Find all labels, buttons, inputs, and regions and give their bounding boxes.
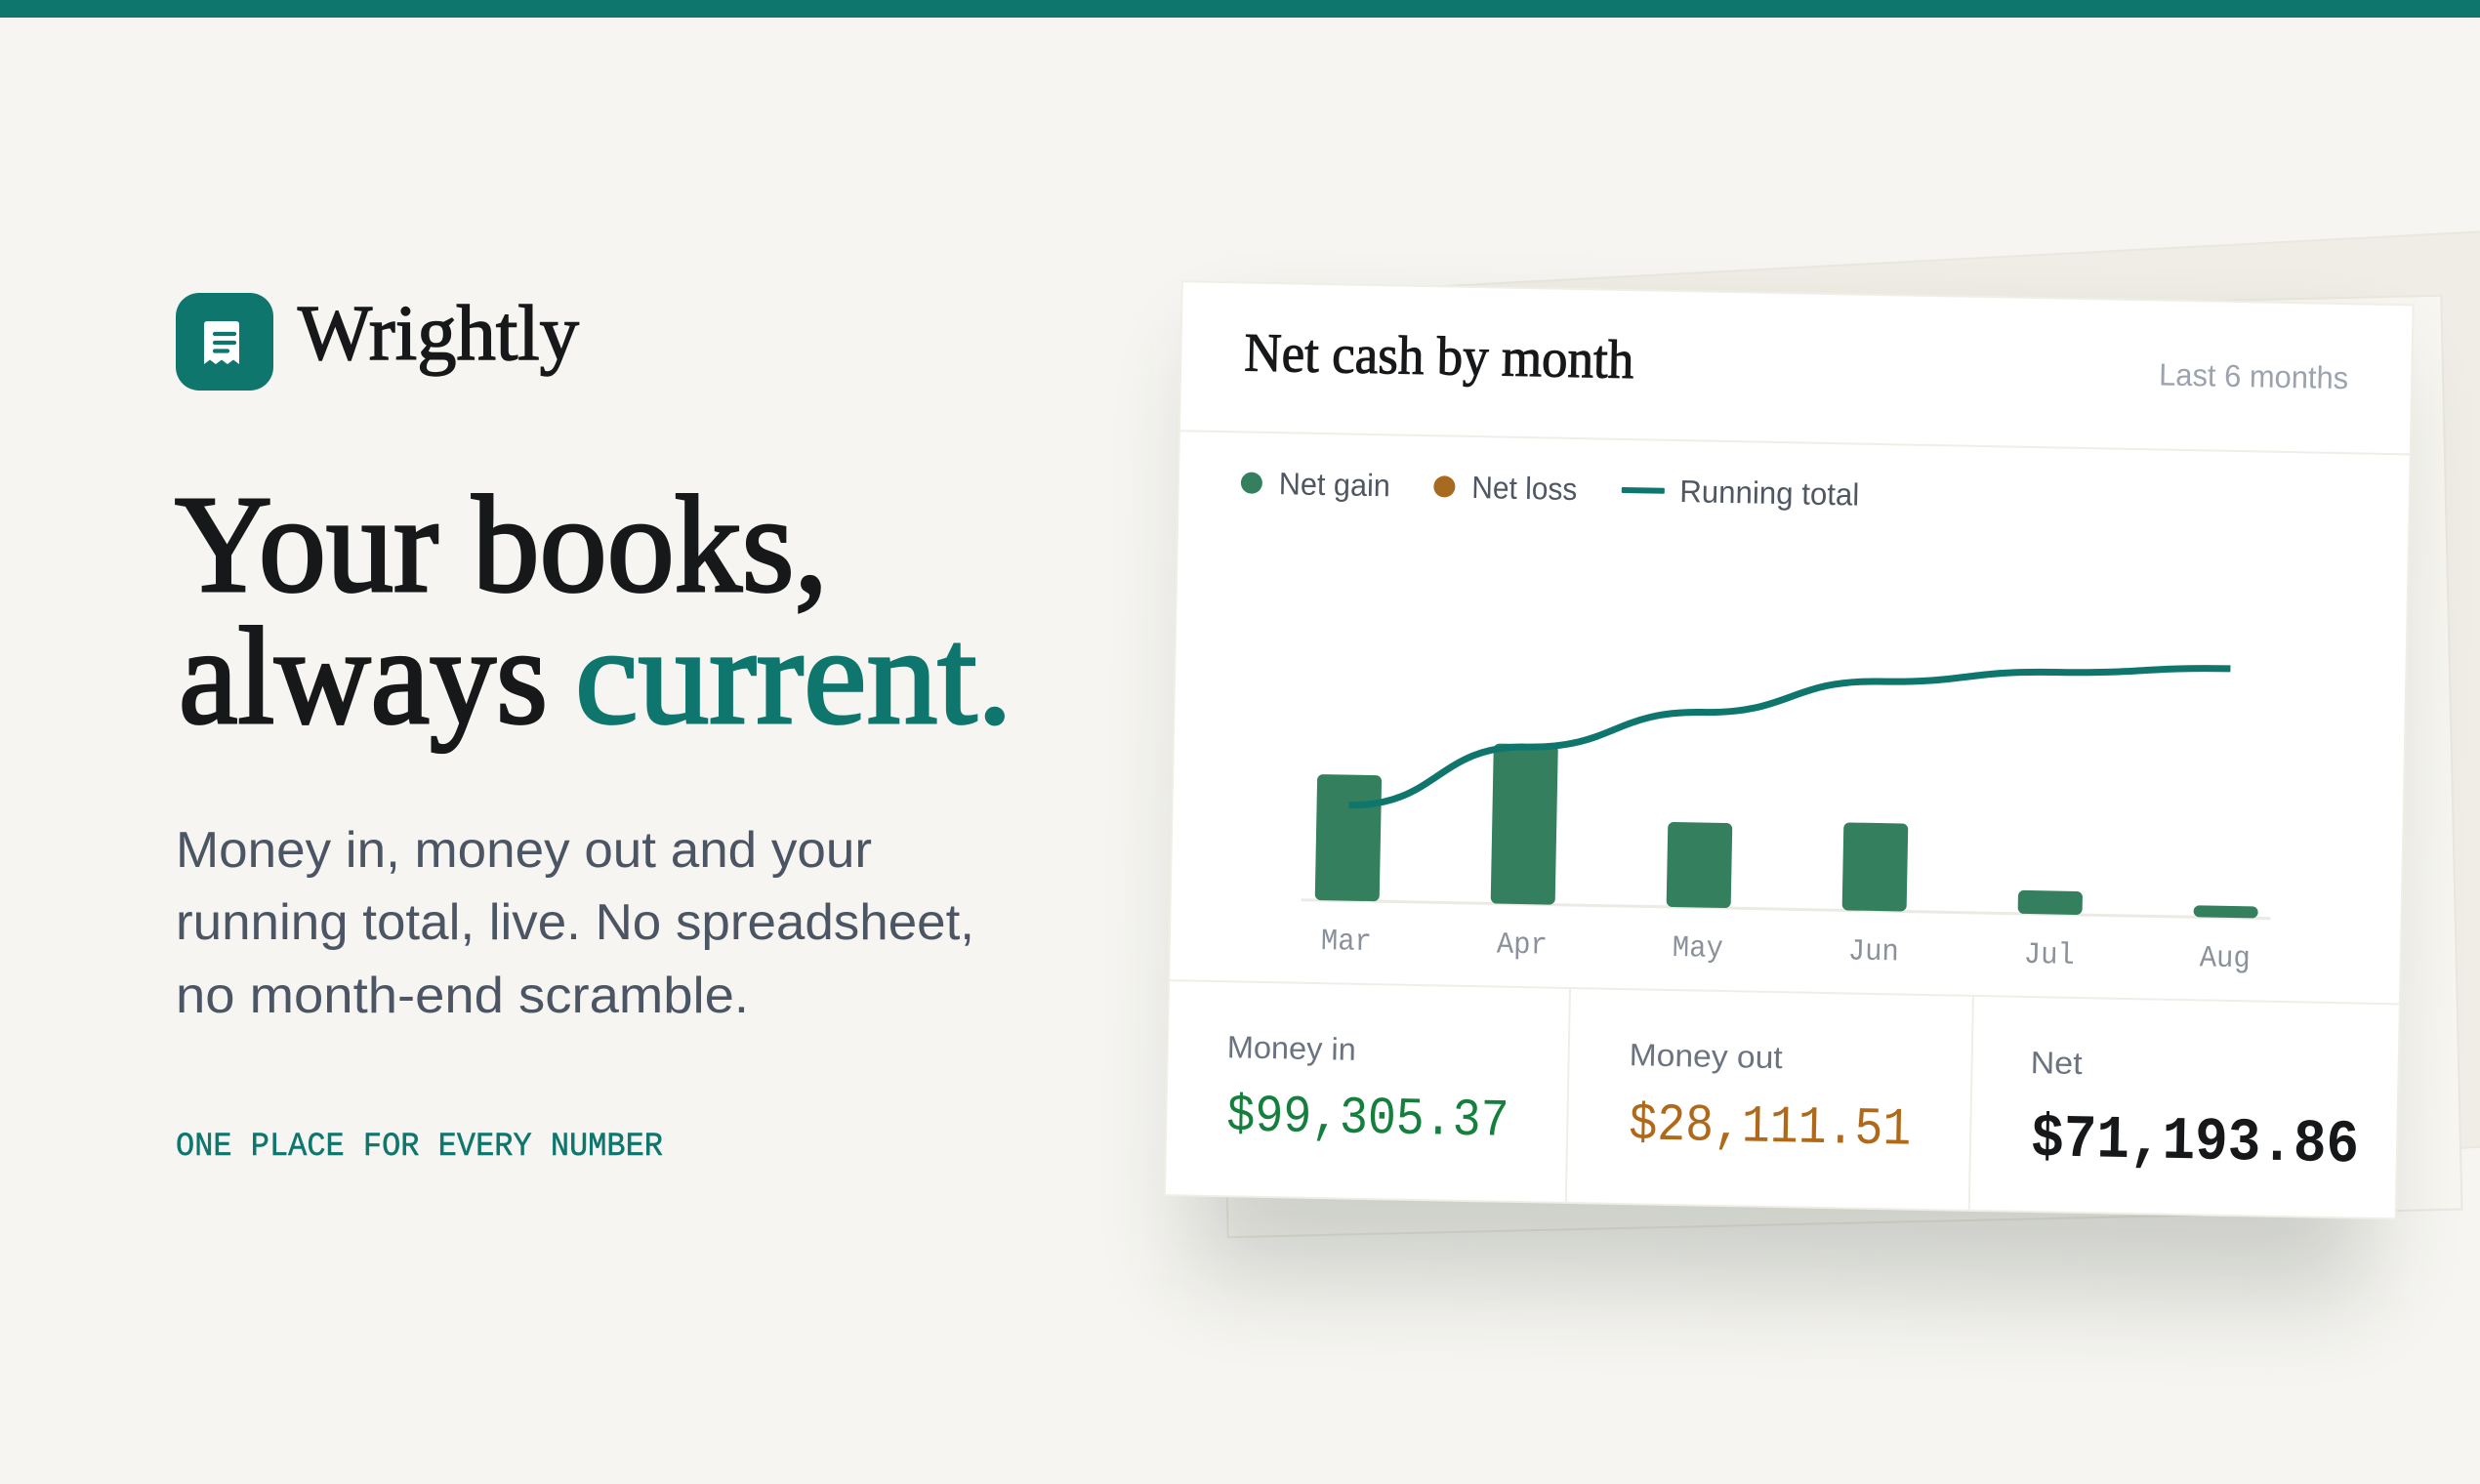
legend: net loss: Net loss (1471, 470, 1578, 507)
legend: net loss (1433, 469, 1578, 507)
headline: Your books, (175, 467, 828, 621)
legend: running total: Running total (1679, 474, 1860, 513)
intro paragraph: no month-end scramble. (176, 968, 749, 1024)
headline: always (179, 598, 548, 753)
month labels: Jun (1847, 934, 1899, 969)
bar: Jun (1842, 822, 1908, 912)
intro paragraph (176, 822, 974, 1024)
month labels: Mar (1321, 925, 1372, 960)
stat: money in: Money in (1226, 1029, 1356, 1067)
top accent bar (0, 0, 2480, 18)
stat: net (2028, 1045, 2361, 1180)
intro paragraph: running total, live. No spreadsheet, (176, 894, 974, 951)
icon: receipt logo (176, 293, 273, 391)
brand name: Wrightly (298, 291, 579, 377)
stat: money in (1225, 1029, 1510, 1152)
card shadow (1190, 341, 2383, 1297)
tagline: ONE PLACE FOR EVERY NUMBER (176, 1129, 663, 1166)
bar: May (1667, 822, 1732, 908)
brand lockup (176, 291, 579, 391)
month labels: Apr (1497, 928, 1548, 964)
chart legend (1241, 465, 1860, 513)
stat: money out: $28,111.51 (1629, 1095, 1912, 1161)
month labels: Jul (2023, 938, 2075, 973)
back sheet: near (1208, 296, 2461, 1237)
bar: Apr (1491, 743, 1558, 905)
running total line (1349, 652, 2230, 822)
stat: net: Net (2030, 1045, 2083, 1081)
month labels: Aug (2199, 941, 2251, 976)
panel: net cash card (1165, 281, 2414, 1218)
stat: money out: Money out (1629, 1037, 1783, 1075)
bar: Mar (1315, 774, 1382, 901)
stat: money out (1628, 1037, 1913, 1161)
headline: current. (575, 598, 1013, 753)
back sheet: far (1263, 231, 2480, 1208)
bar chart (1301, 651, 2275, 977)
intro paragraph: Money in, money out and your (176, 822, 872, 879)
stat: net: $71,193.86 (2030, 1104, 2360, 1180)
legend: net gain: Net gain (1279, 466, 1390, 503)
month labels: May (1672, 931, 1723, 967)
period label: Last 6 months (2159, 356, 2349, 395)
stat: money in: $99,305.37 (1226, 1087, 1509, 1152)
bar: Aug (2194, 905, 2258, 919)
card title: Net cash by month (1244, 322, 1634, 391)
headline (175, 467, 1013, 753)
month labels (1321, 925, 2251, 976)
bar: Jul (2018, 890, 2083, 915)
